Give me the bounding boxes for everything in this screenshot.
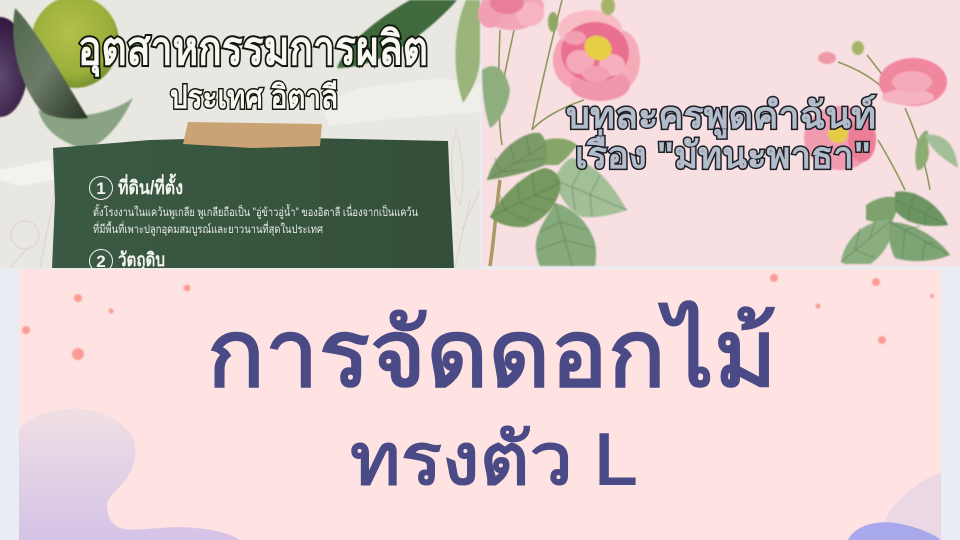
icon: right leaves: [841, 130, 958, 264]
title: อุตสาหกรรมการผลิต: [78, 22, 428, 77]
icon: purple olive: [0, 17, 28, 117]
subtitle: L shape: ทรงตัว L: [350, 420, 637, 500]
icon: left leaves: [482, 66, 627, 266]
icon: pale lower leaf: [38, 98, 133, 149]
title: drama: [566, 95, 876, 176]
icon: green olive: [31, 0, 119, 88]
icon: top right dark leaf: [337, 0, 457, 68]
right blue blob: [848, 522, 941, 540]
panel: flower arranging slide: [19, 269, 941, 540]
icon: small buds: [548, 0, 864, 64]
title: flower arranging: การจัดดอกไม้: [207, 301, 777, 406]
icon: number 2: [90, 250, 112, 272]
panel: green torn paper: [52, 137, 454, 268]
icon: middle rose: [804, 106, 876, 170]
right lavender blob: [881, 473, 941, 540]
title: drama: เรื่อง "มัทนะพาธา": [575, 129, 871, 176]
text block: land description: ตั้งโรงงานในแคว้นพูเกลีย พูเกลียถือเป็น "อู่ข้าวอู่น้ำ" ของอิตาลี เนื่องจากเป็นแคว้น: [93, 204, 418, 219]
text block: land description: ที่มีพื้นที่เพาะปลูกอุดมสมบูรณ์และยาวนานที่สุดในประเทศ: [93, 221, 324, 236]
title: drama: บทละครพูดคำฉันท์: [566, 95, 876, 139]
heading: land: ที่ดิน/ที่ตั้ง: [118, 173, 183, 199]
icon: large rose: [553, 10, 640, 101]
icon: number 2: 2: [96, 252, 106, 271]
icon: number 1: [90, 176, 112, 200]
icon: brown tape: [183, 122, 322, 148]
panel: drama slide: [478, 0, 960, 266]
panel: olive industry slide: [0, 0, 480, 272]
icon: top left rose: [478, 0, 544, 30]
icon: right pale leaf: [455, 0, 480, 103]
icon: dark leaf: [13, 8, 88, 119]
icon: right rose: [879, 58, 947, 106]
icon: number 1: 1: [96, 179, 106, 198]
text block: land description: [93, 204, 418, 236]
decorative dots: [22, 274, 934, 360]
heading: raw materials: วัตถุดิบ: [118, 250, 165, 272]
subtitle: ประเทศ อิตาลี: [170, 79, 338, 115]
left lavender blob: [19, 409, 240, 540]
